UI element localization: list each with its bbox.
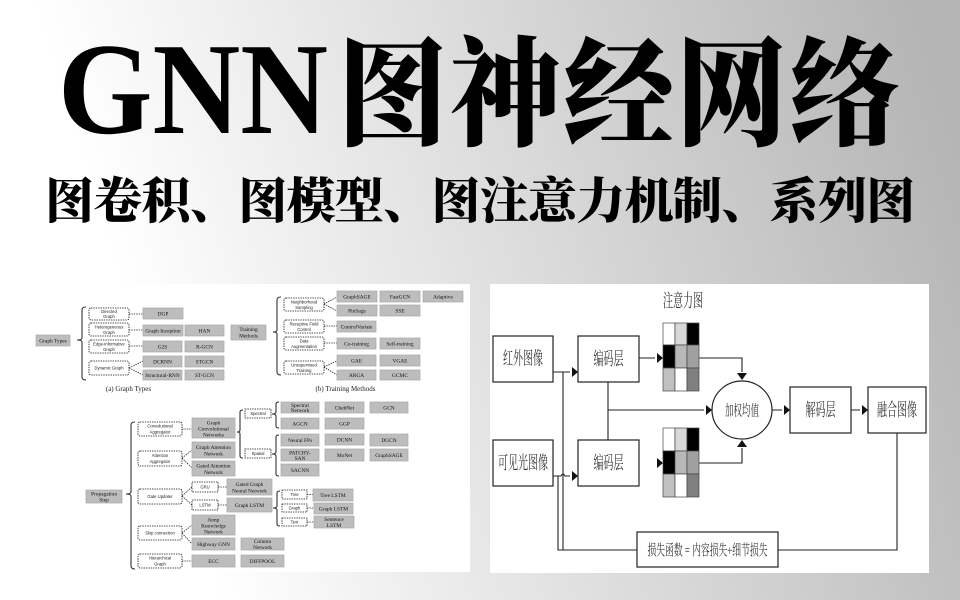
- category: Data Augmentation: [284, 337, 324, 350]
- category: Directed Graph: Graph: [103, 314, 115, 319]
- method: Jump Knowledge Network: Network: [204, 530, 223, 536]
- root: Graph Types: [36, 335, 70, 346]
- category: Receptive Field Control: [284, 320, 324, 333]
- method: Column Network: [241, 538, 284, 551]
- connectors: [307, 494, 314, 522]
- category: Convolutional Aggregator: Aggregator: [150, 430, 171, 434]
- arrowheads: [572, 353, 868, 481]
- brace: spectral: [272, 402, 279, 428]
- category: Spatial: [245, 449, 271, 458]
- method: Structural-RNN: [143, 370, 182, 380]
- label: attention map: 注意力图: [663, 291, 703, 311]
- panel: GNN taxonomy diagrams: [30, 284, 470, 572]
- category: Dynamic Graph: [89, 361, 129, 375]
- category: Convolutional Aggregator: Convolutional: [147, 424, 173, 428]
- category: Spectral: [245, 409, 271, 418]
- method: GraphSAGE: [337, 291, 377, 302]
- method: PATCHY-SAN: PATCHY-: [289, 450, 311, 456]
- method: SSE: [380, 305, 420, 316]
- category: Gate Updater: Gate Updater: [147, 494, 173, 499]
- category: Spectral: Spectral: [250, 411, 266, 416]
- method: PinSage: [337, 305, 377, 316]
- category: Edge-informative Graph: Edge-informative: [93, 342, 125, 346]
- box: decoder: [790, 387, 851, 433]
- method: Sentence LSTM: LSTM: [327, 523, 341, 529]
- category: Spatial: Spatial: [252, 451, 264, 456]
- brace: graph types: [77, 307, 86, 380]
- method: GCN: [370, 402, 408, 413]
- method: PATCHY-SAN: SAN: [295, 456, 305, 462]
- method: GraphSAGE: GraphSAGE: [375, 453, 403, 459]
- method: Graph Convolutional Networks: [192, 418, 235, 438]
- category: Text: Text: [291, 520, 299, 524]
- heatmap: bottom: [663, 428, 699, 497]
- category: Convolutional Aggregator: [138, 422, 182, 436]
- method: Graph LSTM: [314, 503, 353, 514]
- method: ARGA: ARGA: [349, 373, 364, 379]
- brace: aggregator types: [237, 410, 243, 458]
- method: ControlVariate: ControlVariate: [341, 324, 373, 330]
- method: Graph Attention Network: Graph Attention: [196, 445, 231, 451]
- method: Jump Knowledge Network: Jump: [208, 518, 220, 524]
- method: PATCHY-SAN: [281, 449, 319, 462]
- method: Graph Convolutional Networks: Convolutional: [198, 426, 229, 432]
- method: Column Network: Network: [253, 545, 272, 551]
- method: VGAE: VGAE: [393, 358, 408, 364]
- method: GCMC: [380, 370, 420, 380]
- category: Attention Aggregator: [138, 451, 182, 466]
- method: ChebNet: [325, 402, 364, 413]
- method: G2S: G2S: [158, 344, 167, 350]
- subtitle: 图卷积、图模型、图注意力机制、系列图: [45, 174, 915, 229]
- method: GCN: GCN: [383, 406, 395, 412]
- root: Propagation Step: [86, 490, 122, 504]
- method: ECC: ECC: [208, 559, 219, 565]
- category: Edge-informative Graph: Graph: [103, 347, 115, 352]
- root: Propagation Step: Step: [99, 498, 109, 504]
- method: Column Network: Column: [254, 539, 271, 545]
- brace: LSTM types: [273, 491, 280, 526]
- method: GGP: [325, 418, 364, 429]
- box: visible image: [493, 440, 553, 486]
- category: Directed Graph: [89, 308, 129, 320]
- category: Neighborhood Sampling: [284, 298, 324, 311]
- node: weighted average: 加权均值: [725, 402, 759, 420]
- method: Tree LSTM: Tree LSTM: [320, 493, 346, 499]
- method: MoNet: MoNet: [337, 453, 353, 459]
- title: 图神经网络: [337, 31, 900, 162]
- method: Graph Convolutional Networks: Networks: [203, 432, 224, 438]
- diagram: training methods: [231, 291, 463, 393]
- method: Highway GNN: Highway GNN: [197, 542, 230, 548]
- method: Gated Graph Neural Network: [227, 479, 272, 495]
- category: Gate Updater: [138, 489, 182, 504]
- method: R-GCN: R-GCN: [196, 344, 213, 350]
- method: ST-GCN: ST-GCN: [195, 373, 214, 379]
- category: Receptive Field Control: Control: [297, 327, 311, 332]
- connectors: [129, 314, 143, 375]
- method: DCRNN: [143, 356, 182, 367]
- box: fused image: [868, 387, 926, 433]
- root: Graph Types: Graph Types: [39, 338, 67, 344]
- method: GCMC: GCMC: [392, 373, 408, 379]
- method: ChebNet: ChebNet: [335, 406, 355, 412]
- category: GRU: [192, 482, 218, 492]
- category: Attention Aggregator: Attention: [152, 453, 169, 458]
- method: Spectral Network: [281, 402, 319, 414]
- category: Skip connection: Skip connection: [145, 530, 175, 536]
- category: Directed Graph: Directed: [101, 309, 117, 314]
- box: encoder top: 编码层: [594, 349, 624, 369]
- method: HAN: [185, 325, 224, 336]
- method: Neural FPs: [281, 434, 319, 446]
- method: Gated Attention Network: Network: [204, 470, 223, 476]
- box: decoder: 解码层: [806, 400, 836, 420]
- method: Adaptive: Adaptive: [433, 294, 453, 300]
- method: MoNet: [325, 449, 364, 461]
- method: ControlVariate: [337, 321, 376, 332]
- method: Self-training: Self-training: [386, 340, 414, 348]
- category: Edge-informative Graph: [89, 340, 129, 353]
- method: DGCN: [370, 434, 408, 446]
- category: Tree: Tree: [290, 492, 299, 497]
- brace: spatial: [272, 435, 279, 476]
- category: LSTM: [192, 500, 218, 510]
- category: Heterogeneous Graph: Heterogeneous: [95, 324, 123, 330]
- category: GRU: GRU: [200, 484, 210, 490]
- box: encoder top: [578, 336, 639, 382]
- method: DCNN: DCNN: [337, 438, 352, 444]
- category: Tree: [282, 490, 307, 499]
- box: encoder bottom: [578, 440, 639, 486]
- method: ARGA: [337, 370, 376, 380]
- method: DGCN: DGCN: [381, 438, 397, 444]
- connectors: [324, 297, 337, 375]
- method: STGCN: STGCN: [196, 360, 213, 366]
- method: Graph Attention Network: [192, 442, 235, 458]
- box: encoder bottom: 编码层: [594, 453, 624, 473]
- method: Gated Graph Neural Network: Neural Network: [232, 488, 267, 494]
- caption b: (b) Training Methods: [316, 385, 376, 393]
- title: [58, 17, 900, 162]
- method: ECC: [192, 555, 235, 567]
- method: DCRNN: DCRNN: [153, 360, 172, 366]
- category: Receptive Field Control: Receptive Field: [290, 322, 319, 326]
- method: Gated Attention Network: Gated Attention: [196, 464, 231, 470]
- box: visible image: 可见光图像: [498, 453, 548, 473]
- category: Heterogeneous Graph: [89, 323, 129, 336]
- connecting lines: [553, 358, 897, 550]
- method: SACNN: SACNN: [291, 468, 309, 474]
- brace: propagation: [126, 422, 135, 569]
- method: DGP: DGP: [158, 312, 168, 318]
- method: GraphSAGE: [370, 449, 408, 461]
- method: HAN: HAN: [199, 328, 210, 334]
- category: Unsupervised Training: Training: [297, 368, 312, 373]
- method: PinSage: PinSage: [348, 308, 366, 314]
- method: AGCN: [281, 418, 319, 429]
- diagram: graph types: [36, 307, 224, 393]
- method: DCNN: [325, 434, 364, 445]
- category: Unsupervised Training: [284, 361, 324, 374]
- method: VGAE: [380, 355, 420, 366]
- method: G2S: [143, 341, 182, 352]
- method: DIFFPOOL: DIFFPOOL: [250, 559, 275, 565]
- method: GGP: GGP: [339, 422, 350, 428]
- method: DGP: [143, 308, 183, 319]
- method: Graph Inception: Graph Inception: [145, 328, 181, 334]
- method: Jump Knowledge Network: [192, 515, 235, 536]
- method: DIFFPOOL: [241, 555, 284, 567]
- method: GAE: GAE: [351, 358, 363, 364]
- method: Graph LSTM: Graph LSTM: [235, 503, 264, 509]
- method: Graph LSTM: [227, 498, 272, 512]
- method: Self-training: [380, 338, 420, 349]
- method: AGCN: AGCN: [292, 422, 308, 428]
- method: SACNN: [281, 464, 319, 476]
- category: Dynamic Graph: Dynamic Graph: [94, 366, 124, 370]
- root: Propagation Step: Propagation: [91, 492, 117, 498]
- method: GraphSAGE: GraphSAGE: [343, 294, 371, 300]
- panel: fusion network flowchart: [490, 284, 929, 573]
- heatmap: top: [663, 323, 699, 391]
- box: infrared image: 红外图像: [503, 348, 543, 368]
- method: Jump Knowledge Network: Knowledge: [201, 524, 227, 530]
- caption a: (a) Graph Types: [106, 385, 151, 393]
- category: Heterogeneous Graph: Graph: [103, 330, 115, 335]
- root: Training Methods: [231, 325, 266, 340]
- node: weighted average: [712, 381, 772, 439]
- method: Graph LSTM: Graph LSTM: [319, 506, 348, 512]
- root: Training Methods: Methods: [239, 334, 258, 340]
- category: Data Augmentation: Augmentation: [291, 344, 318, 349]
- category: LSTM: LSTM: [199, 502, 211, 508]
- box: loss function: 损失函数 = 内容损失+细节损失: [648, 541, 768, 559]
- method: Sentence LSTM: [314, 516, 354, 529]
- diagram: propagation step: [86, 402, 408, 569]
- brace: training methods: [273, 297, 281, 375]
- category: Hierarchical Graph: [138, 554, 182, 568]
- method: Gated Graph Neural Network: Gated Graph: [236, 482, 264, 488]
- category: Unsupervised Training: Unsupervised: [291, 362, 317, 368]
- category: Neighborhood Sampling: Neighborhood: [291, 300, 318, 304]
- method: Neural FPs: Neural FPs: [288, 438, 312, 444]
- title: GNN: [58, 17, 328, 162]
- method: Co-training: Co-training: [344, 342, 369, 348]
- category: Text: [282, 518, 307, 526]
- method: R-GCN: [185, 341, 224, 352]
- method: Highway GNN: [192, 538, 235, 550]
- method: Graph Convolutional Networks: Graph: [207, 420, 221, 426]
- category: Hierarchical Graph: Graph: [154, 562, 166, 566]
- box: loss function: [637, 532, 778, 567]
- method: FastGCN: [380, 291, 420, 302]
- method: Spectral Network: Spectral: [291, 403, 309, 409]
- category: Skip connection: [138, 526, 182, 540]
- category: Hierarchical Graph: Hierarchical: [149, 556, 171, 560]
- root: Training Methods: Training: [239, 327, 258, 333]
- method: Sentence LSTM: Sentence: [324, 517, 344, 523]
- method: Gated Attention Network: [192, 461, 235, 476]
- box: infrared image: [493, 336, 553, 382]
- method: Graph Attention Network: Network: [204, 452, 223, 458]
- method: ST-GCN: [185, 370, 224, 380]
- method: Tree LSTM: [313, 489, 353, 501]
- method: Adaptive: [423, 291, 463, 302]
- method: Co-training: [337, 338, 376, 349]
- method: SSE: SSE: [395, 308, 405, 314]
- method: Spectral Network: Network: [291, 408, 310, 414]
- method: Structural-RNN: Structural-RNN: [145, 373, 180, 379]
- box: fused image: 融合图像: [877, 400, 917, 420]
- method: FastGCN: FastGCN: [390, 294, 410, 300]
- category: Neighborhood Sampling: Sampling: [295, 305, 313, 310]
- category: Attention Aggregator: Aggregator: [150, 459, 171, 464]
- connectors: [182, 429, 227, 561]
- method: GAE: [337, 355, 376, 366]
- category: Data Augmentation: Data: [300, 338, 309, 344]
- category: Graph: Graph: [289, 506, 301, 510]
- method: Graph Inception: [143, 325, 183, 336]
- category: Graph: [282, 504, 307, 512]
- method: STGCN: [185, 356, 224, 367]
